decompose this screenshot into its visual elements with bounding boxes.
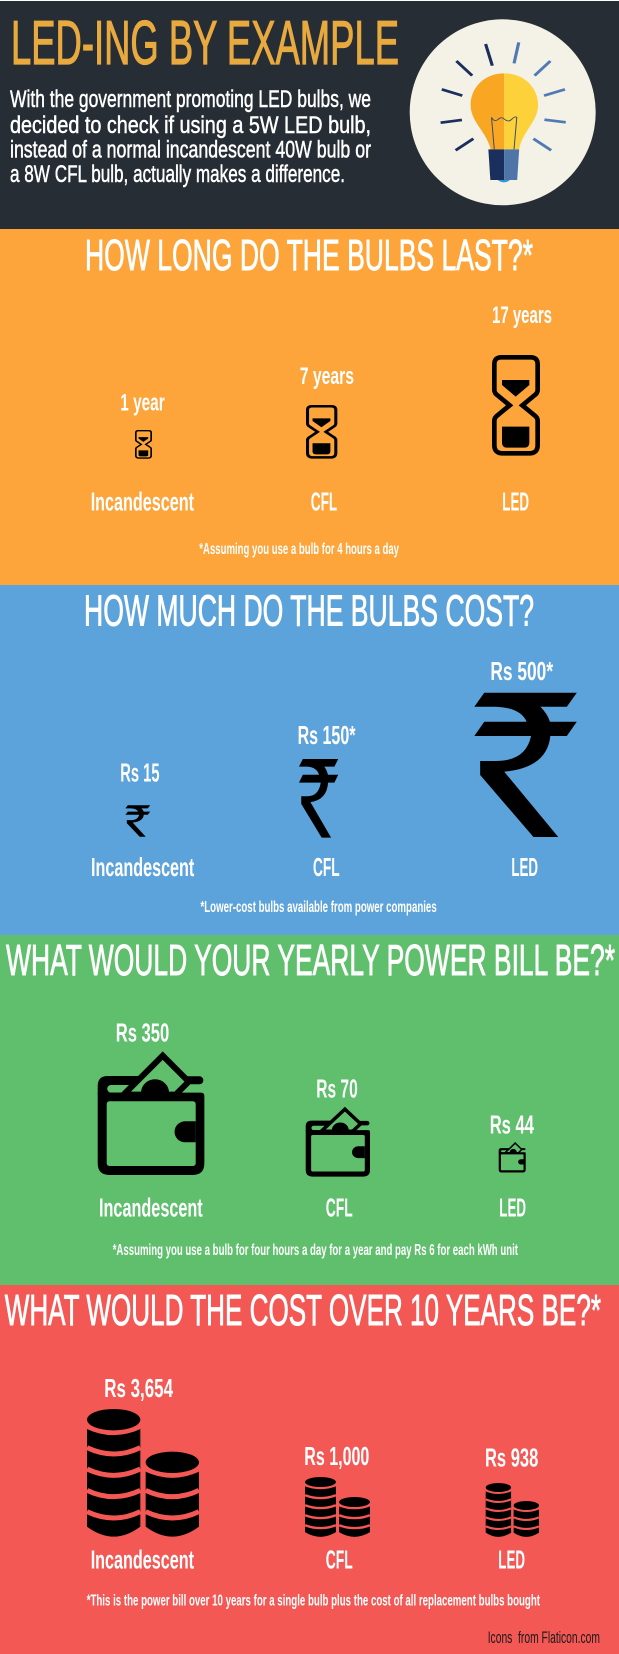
panel: header bbox=[0, 1, 619, 229]
intro text: instead of a normal incandescent 40W bulb or bbox=[10, 136, 371, 164]
icon: small coin stacks bbox=[486, 1483, 539, 1537]
icon: medium hourglass bbox=[308, 406, 336, 457]
icon: light bulb in circle bbox=[410, 19, 596, 205]
panel: cost over 10 years bbox=[0, 1285, 619, 1654]
value: CFL total: Rs 1,000 bbox=[304, 1441, 369, 1471]
label: incandescent: Incandescent bbox=[91, 1545, 194, 1575]
label: CFL: CFL bbox=[313, 852, 340, 882]
value: LED total: Rs 938 bbox=[485, 1443, 538, 1473]
label: CFL: CFL bbox=[326, 1545, 353, 1575]
icon: large wallet bbox=[98, 1056, 204, 1175]
label: LED: LED bbox=[498, 1545, 525, 1575]
value: incandescent life: 1 year bbox=[120, 390, 165, 417]
label: CFL: CFL bbox=[326, 1193, 353, 1223]
value: LED life: 17 years bbox=[492, 302, 552, 329]
icon: large rupee bbox=[474, 693, 577, 837]
label: CFL: CFL bbox=[311, 487, 337, 517]
intro text bbox=[10, 86, 371, 188]
icon: small hourglass bbox=[136, 431, 151, 458]
icon: large hourglass bbox=[494, 357, 538, 453]
value: LED bill: Rs 44 bbox=[490, 1110, 534, 1140]
label: incandescent: Incandescent bbox=[91, 852, 195, 882]
label: incandescent: Incandescent bbox=[99, 1193, 203, 1223]
panel: yearly power bill bbox=[0, 935, 619, 1285]
panel: how long do the bulbs last bbox=[0, 229, 619, 585]
label: incandescent: Incandescent bbox=[91, 487, 194, 517]
intro text: a 8W CFL bulb, actually makes a difference. bbox=[10, 161, 345, 188]
icon: medium wallet bbox=[306, 1109, 370, 1177]
value: CFL price: Rs 150* bbox=[298, 720, 356, 750]
icon: medium rupee bbox=[299, 759, 338, 838]
icon: small wallet bbox=[499, 1143, 526, 1173]
icon: small rupee bbox=[125, 805, 150, 837]
intro text: decided to check if using a 5W LED bulb, bbox=[10, 112, 371, 139]
value: CFL bill: Rs 70 bbox=[316, 1074, 358, 1104]
value: LED price: Rs 500* bbox=[490, 656, 554, 686]
icon: large coin stacks bbox=[87, 1409, 199, 1537]
label: LED: LED bbox=[502, 487, 529, 517]
footnote: *Lower-cost bulbs available from power companies bbox=[200, 899, 437, 916]
value: incandescent bill: Rs 350 bbox=[116, 1018, 169, 1048]
icon: medium coin stacks bbox=[305, 1477, 370, 1537]
label: LED: LED bbox=[499, 1193, 526, 1223]
value: incandescent price: Rs 15 bbox=[120, 758, 160, 788]
label: LED: LED bbox=[511, 852, 538, 882]
panel: how much do the bulbs cost bbox=[0, 585, 619, 935]
footnote: *Assuming you use a bulb for 4 hours a day bbox=[199, 541, 399, 558]
value: CFL life: 7 years bbox=[300, 363, 354, 390]
value: incandescent total: Rs 3,654 bbox=[104, 1373, 173, 1403]
intro text: With the government promoting LED bulbs, we bbox=[10, 86, 371, 113]
